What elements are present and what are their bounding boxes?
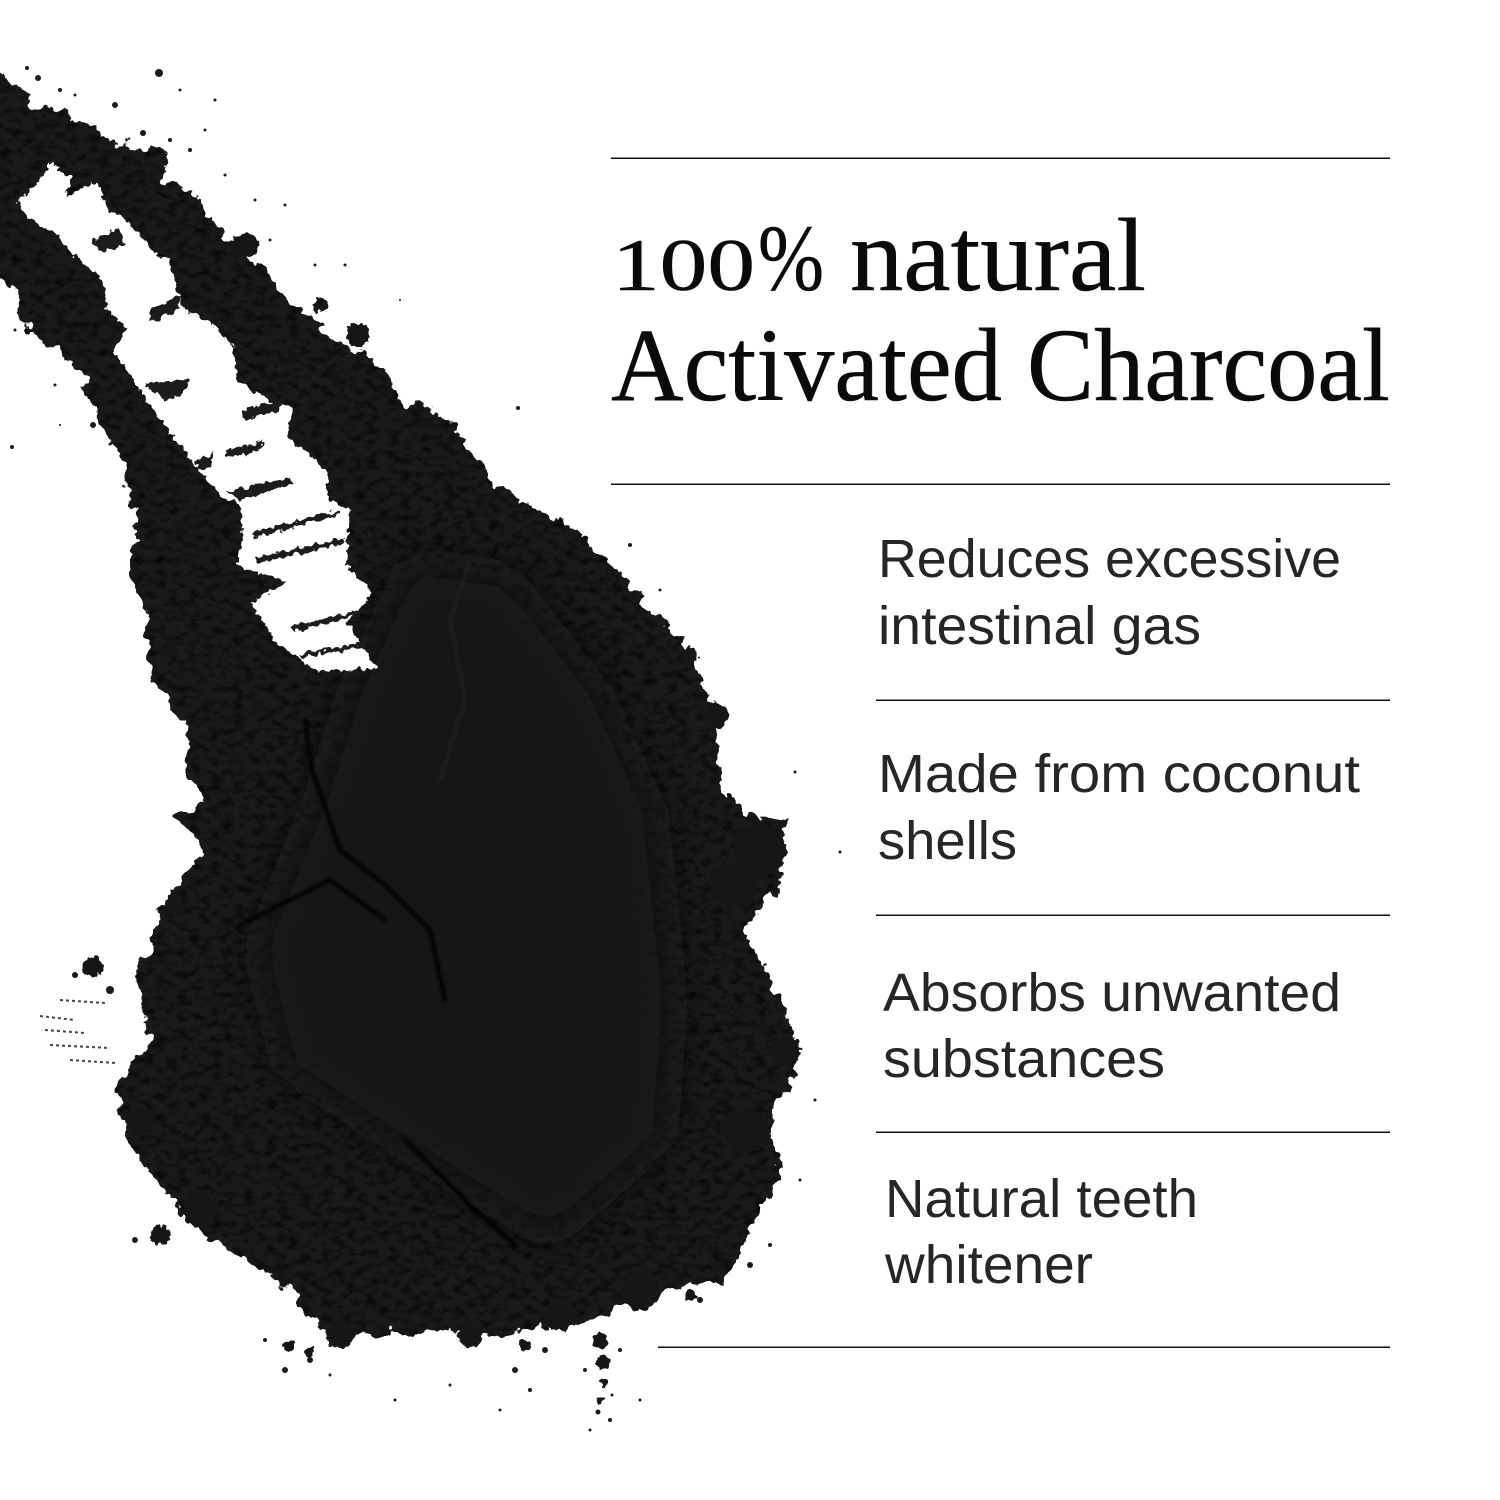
benefit: absorbs substances [883,963,1341,1089]
benefit: teeth whitener: whitener [884,1235,1093,1295]
rule: after benefit 1 [876,700,1390,701]
cracks in the powder [240,560,515,1245]
scattered powder specks [10,66,842,1432]
benefit: absorbs substances: Absorbs unwanted [883,963,1341,1023]
rule: bottom of title [611,484,1390,485]
benefit: coconut shells: Made from coconut [878,744,1360,804]
dark islands inside the gap [90,228,370,658]
benefit: reduces gas: Reduces excessive [878,529,1341,589]
benefit: reduces gas: intestinal gas [878,596,1201,656]
rule: after benefit 2 [876,914,1390,916]
smooth compressed centre [255,560,675,1240]
benefit: teeth whitener: Natural teeth [885,1169,1198,1229]
benefit: coconut shells [878,744,1360,871]
title: % [758,207,824,311]
title [611,198,1390,423]
white gap between the strands [17,162,377,672]
powder clumps along the edge [83,233,800,1404]
charcoal powder swipe [0,50,842,1432]
title: 100 [612,225,755,307]
title: Activated Charcoal [611,308,1390,423]
rule: after benefit 3 [876,1132,1390,1133]
rule: top of title [611,158,1390,159]
benefit: teeth whitener [884,1169,1198,1295]
rule: bottom [658,1346,1390,1348]
benefit: reduces gas [878,529,1341,656]
benefit: coconut shells: shells [878,811,1017,871]
powder body [0,50,795,1340]
title: natural [850,198,1146,313]
benefit: absorbs substances: substances [883,1029,1165,1089]
